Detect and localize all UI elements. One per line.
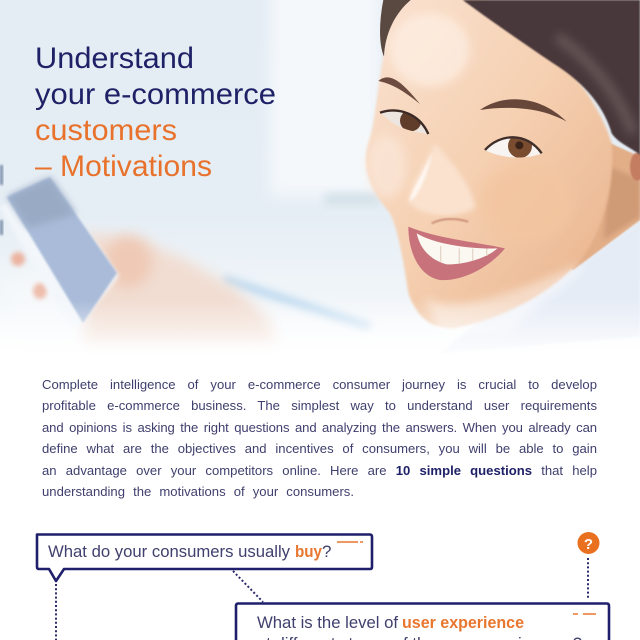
callout: what do your consumers buy: buy (295, 542, 322, 561)
hair (380, 0, 411, 57)
intro paragraph: define what are the objectives and incentives of consumers, you will be able to gain (42, 441, 597, 456)
lips (408, 227, 505, 280)
intro paragraph: understanding the motivations of your consumers. (42, 484, 354, 499)
title (35, 42, 276, 183)
icon: question mark (578, 532, 600, 554)
callout: level of user experience: user experience (402, 613, 524, 632)
neck and ear (553, 140, 640, 270)
face highlights and shadow (390, 13, 470, 87)
right eye (485, 138, 542, 157)
connector: dotted lines (56, 558, 588, 640)
title: your e-commerce (35, 78, 276, 111)
photo: hand holding smartphone (0, 165, 277, 345)
intro paragraph (42, 377, 597, 499)
title: – Motivations (35, 150, 212, 183)
callout: level of user experience: What is the level of (257, 613, 398, 632)
intro paragraph: and opinions is asking the right questions and analyzing the answers. When you already can (42, 420, 597, 435)
callout: what do your consumers buy (37, 534, 372, 581)
intro paragraph: profitable e-commerce business. The simplest way to understand user requirements (42, 398, 597, 413)
collar and shirt (440, 223, 640, 353)
eyebrows (378, 77, 420, 104)
nostril shadow (432, 219, 468, 223)
callout: what do your consumers buy: What do your consumers usually (48, 542, 290, 561)
hero photo background (0, 0, 640, 360)
photo fade to white (0, 300, 640, 362)
left eye (382, 111, 428, 134)
teeth (417, 233, 497, 264)
icon: question mark: ? (584, 536, 593, 553)
title: Understand (35, 42, 194, 75)
face (366, 0, 612, 328)
intro paragraph: Complete intelligence of your e-commerce consumer journey is crucial to develop (42, 377, 597, 392)
intro paragraph: an advantage over your competitors online. Here are 10 simple questions that help (42, 463, 597, 478)
callout: level of user experience (236, 604, 609, 640)
callout: what do your consumers buy: ? (322, 542, 331, 561)
photo: smiling woman (366, 0, 640, 353)
title: customers (35, 114, 177, 147)
